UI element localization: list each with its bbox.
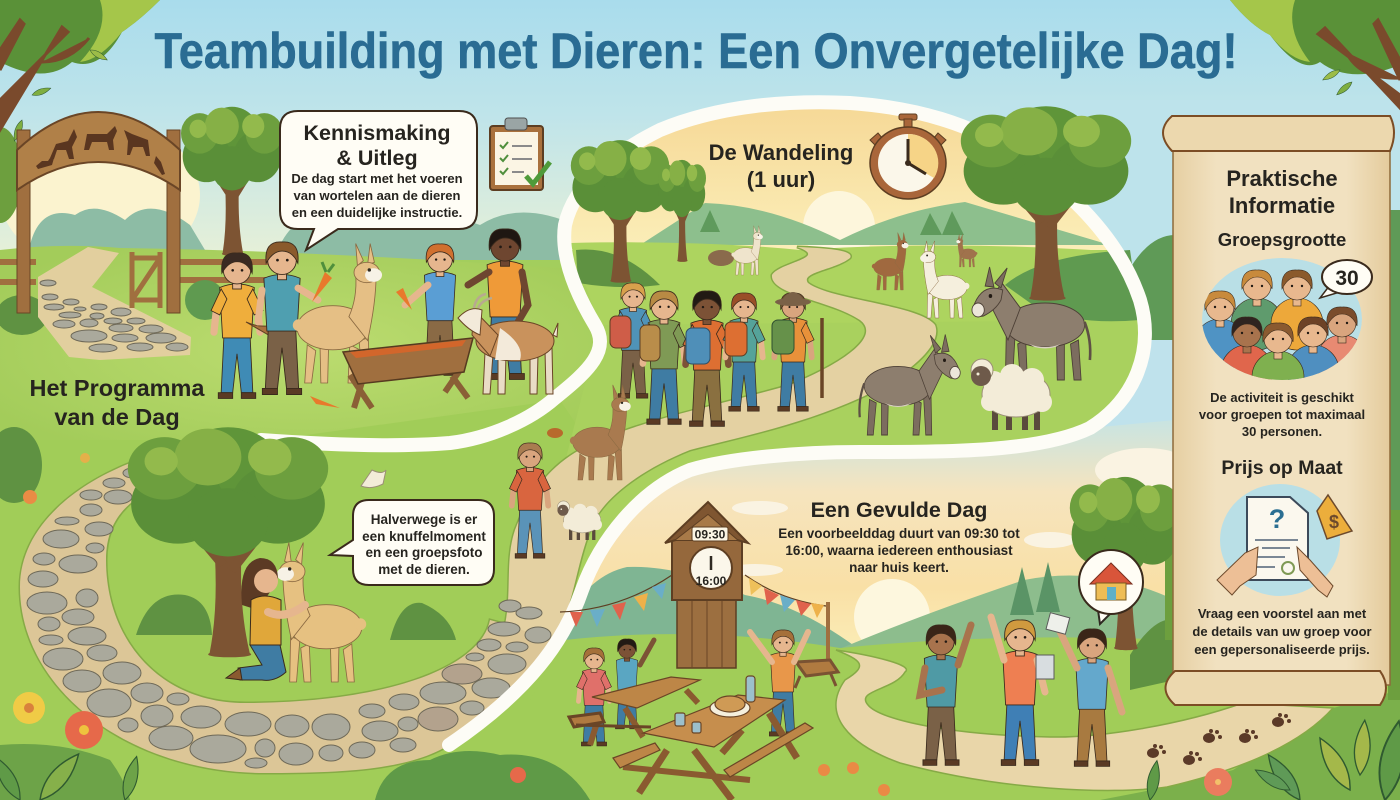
panel: lower evening landscape	[430, 420, 1400, 800]
foreground plants and flowers	[0, 396, 1400, 800]
heading: een gevulde dag: naar huis keert.	[849, 560, 949, 575]
panel: praktische informatie scroll	[1163, 116, 1394, 705]
standing woman	[750, 630, 808, 736]
icon: house bubble	[1079, 550, 1143, 624]
stone path	[27, 280, 551, 768]
wooden arch gate	[0, 112, 275, 313]
tree behind the gate	[181, 107, 283, 256]
white winding ribbon	[261, 102, 1145, 745]
man with carrot	[258, 242, 334, 395]
speech bubble: kennismaking: van wortelen aan de dieren	[294, 188, 460, 203]
heading: de wandeling: (1 uur)	[747, 167, 815, 192]
speech bubble: knuffelmoment: een knuffelmoment	[362, 529, 486, 544]
goat	[458, 294, 558, 394]
speech bubble: knuffelmoment: Halverwege is er	[371, 512, 478, 527]
text: groepsgrootte: voor groepen tot maximaal	[1199, 407, 1365, 422]
heading: prijs op maat: Prijs op Maat	[1221, 457, 1343, 479]
text: prijs op maat	[1192, 606, 1372, 657]
corner foliage top right	[1230, 0, 1400, 108]
seated man	[615, 639, 654, 729]
speech bubble: kennismaking	[280, 111, 477, 250]
speech bubble: knuffelmoment: met de dieren.	[378, 562, 470, 577]
speech bubble: kennismaking: en een duidelijke instructie.	[292, 205, 462, 220]
picnic scene	[569, 630, 838, 800]
icon: quote document: $	[1329, 512, 1339, 532]
trees	[571, 140, 669, 283]
icon: clipboard	[490, 118, 550, 190]
scroll bottom roll	[1166, 671, 1386, 705]
text: prijs op maat: Vraag een voorstel aan met	[1198, 606, 1367, 621]
heading: praktische informatie: Informatie	[1229, 193, 1335, 218]
man in teal	[920, 625, 971, 765]
text: groepsgrootte	[1199, 390, 1365, 439]
middle meadow scene	[571, 106, 1131, 435]
text: prijs op maat: de details van uw groep voor	[1192, 624, 1372, 639]
bubble: 30: 30	[1335, 267, 1359, 290]
heading: praktische informatie	[1226, 166, 1338, 218]
woman feeding	[396, 244, 457, 375]
heading: de wandeling	[709, 140, 853, 192]
text: groepsgrootte: De activiteit is geschikt	[1210, 390, 1355, 405]
heading: programma: Het Programma	[30, 375, 205, 401]
left meadow scene	[0, 107, 558, 408]
woman with tray	[211, 253, 290, 398]
heading: groepsgrootte: Groepsgrootte	[1218, 229, 1346, 250]
sandy paths	[20, 247, 1333, 790]
speech bubble: kennismaking: Kennismaking	[304, 121, 450, 145]
heading: een gevulde dag: Een Gevulde Dag	[811, 498, 987, 522]
heading: een gevulde dag: 16:00, waarna iedereen enthousiast	[785, 543, 1013, 558]
group waving goodbye	[920, 613, 1122, 766]
icon: stopwatch	[870, 114, 946, 199]
man in orange	[468, 229, 528, 379]
picnic table front	[613, 676, 813, 800]
scroll top roll	[1163, 116, 1394, 151]
bunting	[560, 575, 828, 670]
paw prints	[1147, 713, 1291, 765]
path edges	[20, 247, 936, 773]
icon: quote document	[1217, 484, 1352, 597]
speech bubble: knuffelmoment: en een groepsfoto	[365, 545, 483, 560]
corner foliage top left	[0, 0, 160, 142]
flowers	[13, 453, 1232, 796]
icon: quote document: ?	[1269, 504, 1285, 534]
title: Teambuilding met Dieren: Een Onvergetelijke Dag!	[154, 23, 1238, 79]
donkeys and sheep	[972, 267, 1090, 380]
alpaca	[293, 244, 382, 383]
heading: een gevulde dag: Een voorbeelddag duurt van 09:30 tot	[778, 526, 1020, 541]
seated woman	[577, 648, 611, 746]
feed trough	[343, 338, 473, 408]
path animals and walker	[361, 385, 631, 558]
clock tower	[560, 502, 828, 670]
speech bubble: kennismaking: De dag start met het voeren	[291, 171, 463, 186]
text: prijs op maat: een gepersonaliseerde prijs.	[1194, 642, 1370, 657]
bush beside fence	[185, 280, 225, 320]
heading: praktische informatie: Praktische	[1226, 166, 1338, 191]
man in orange	[991, 617, 1054, 765]
walking group	[610, 283, 822, 426]
heading: programma: van de Dag	[54, 404, 180, 430]
carrot on the grass	[310, 396, 340, 408]
speech bubble: kennismaking: & Uitleg	[336, 146, 418, 170]
heading: programma	[30, 375, 205, 430]
distant animals	[708, 226, 977, 318]
picnic table back	[569, 677, 700, 745]
tree behind the house bubble	[1070, 477, 1180, 650]
far picnic table	[795, 660, 838, 688]
clock tower: 09:30	[695, 528, 726, 542]
panel: middle meadow	[540, 102, 1145, 590]
text: groepsgrootte: 30 personen.	[1242, 424, 1322, 439]
woman in blue	[1046, 613, 1122, 766]
heading: de wandeling: De Wandeling	[709, 140, 853, 165]
group portrait	[1202, 258, 1362, 380]
hug scene	[128, 427, 456, 682]
clock tower: 16:00	[696, 574, 727, 588]
bubble: 30	[1320, 260, 1372, 298]
speech bubble: knuffelmoment	[330, 500, 494, 585]
heading: een gevulde dag	[778, 498, 1020, 575]
